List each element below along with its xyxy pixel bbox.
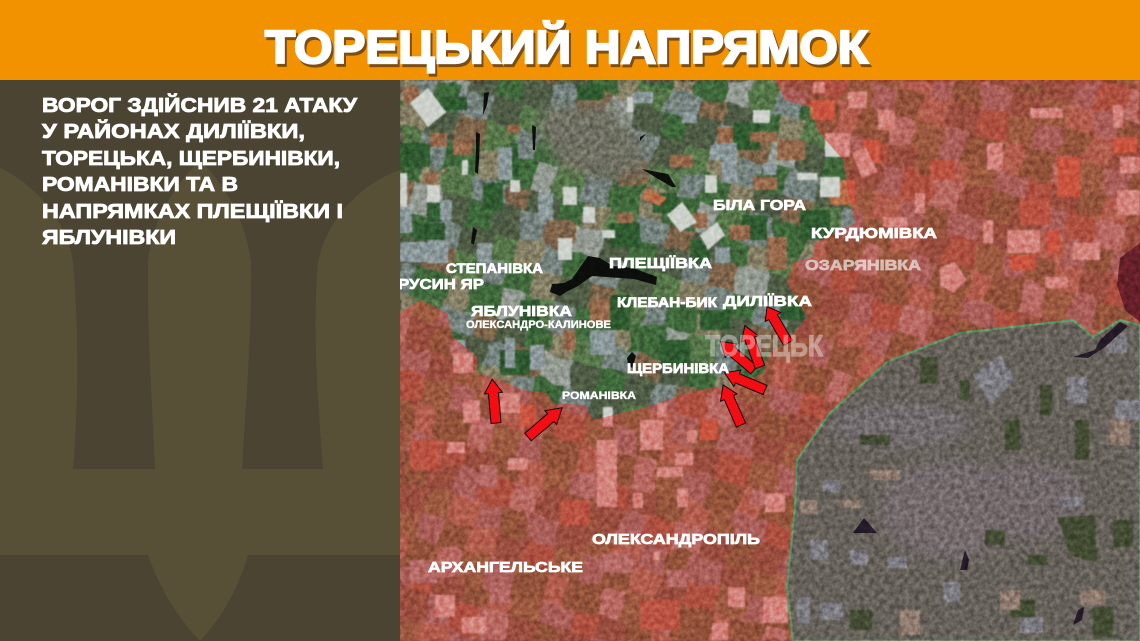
icon: small dark ponds and ravines — [471, 92, 676, 368]
icon: dark ponds in urban zone — [853, 322, 1128, 625]
map labels: settlements: РОМАНІВКА — [562, 390, 636, 402]
map labels: settlements: ТОРЕЦЬК — [705, 330, 824, 363]
arrow: towards Toretsk north — [740, 324, 766, 370]
map labels: settlements — [398, 197, 937, 576]
heading: title shadow: ТОРЕЦЬКИЙ НАПРЯМОК — [267, 24, 871, 76]
text block: summary of attacks — [42, 93, 357, 249]
arrow: towards Toretsk west — [720, 341, 756, 374]
text block: summary of attacks: У РАЙОНАХ ДИЛІЇВКИ, — [42, 119, 305, 143]
map: grey urban zone around Horlivka — [787, 320, 1140, 641]
text block: summary of attacks: НАПРЯМКАХ ПЛЕЩІЇВКИ І — [42, 200, 343, 223]
map labels: settlements: ПЛЕЩІЇВКА — [609, 255, 712, 272]
map overlay: occupied territory in red — [400, 80, 1140, 641]
map labels: settlements: КЛЕБАН-БИК — [617, 294, 717, 310]
map labels: settlements: ОЗАРЯНІВКА — [805, 257, 921, 274]
map texture — [400, 80, 1140, 641]
map labels: settlements: РУСИН ЯР — [398, 276, 484, 293]
arrow: towards Yablunivka — [483, 378, 505, 424]
arrow: towards Dyliivka — [764, 306, 793, 346]
arrows: direction of enemy attacks — [483, 302, 796, 444]
text block: summary of attacks: РОМАНІВКИ ТА В — [42, 173, 238, 196]
text block: summary of attacks: ЯБЛУНІВКИ — [42, 226, 176, 249]
heading: title: ТОРЕЦЬКИЙ НАПРЯМОК — [265, 21, 869, 73]
map labels: settlements: СТЕПАНІВКА — [446, 260, 543, 276]
map labels: settlements: КУРДЮМІВКА — [811, 225, 937, 242]
map labels: settlements: ДИЛІЇВКА — [723, 293, 812, 310]
map: reservoir in occupied zone — [1117, 243, 1140, 322]
panel: left background with trident emblem — [0, 80, 400, 641]
map labels: settlements: ЯБЛУНІВКА — [471, 303, 572, 320]
map: town in the north — [535, 105, 650, 180]
map labels: settlements: АРХАНГЕЛЬСЬКЕ — [428, 559, 583, 576]
icon: trident emblem watermark — [0, 160, 400, 641]
arrow: south of Shcherbynivka — [720, 384, 746, 428]
map labels: settlements: ОЛЕКСАНДРО-КАЛИНОВЕ — [466, 319, 611, 331]
text block: summary of attacks: ВОРОГ ЗДІЙСНИВ 21 АТАКУ — [42, 93, 357, 117]
map fields — [400, 82, 1140, 640]
map labels: settlements: ОЛЕКСАНДРОПІЛЬ — [592, 531, 760, 548]
map labels: settlements: БІЛА ГОРА — [713, 197, 806, 214]
arrow: east of Shcherbynivka — [724, 369, 768, 396]
text block: summary of attacks: ТОРЕЦЬКА, ЩЕРБИНІВКИ, — [42, 147, 340, 170]
icon: Pleshchiivka reservoir — [550, 256, 657, 296]
map labels: settlements: ЩЕРБИНІВКА — [627, 360, 729, 376]
arrow: towards Romanivka — [524, 407, 563, 442]
panel: satellite map — [398, 80, 1140, 641]
panel: orange header bar — [0, 0, 1140, 80]
map base: farmland patchwork — [400, 80, 1140, 641]
